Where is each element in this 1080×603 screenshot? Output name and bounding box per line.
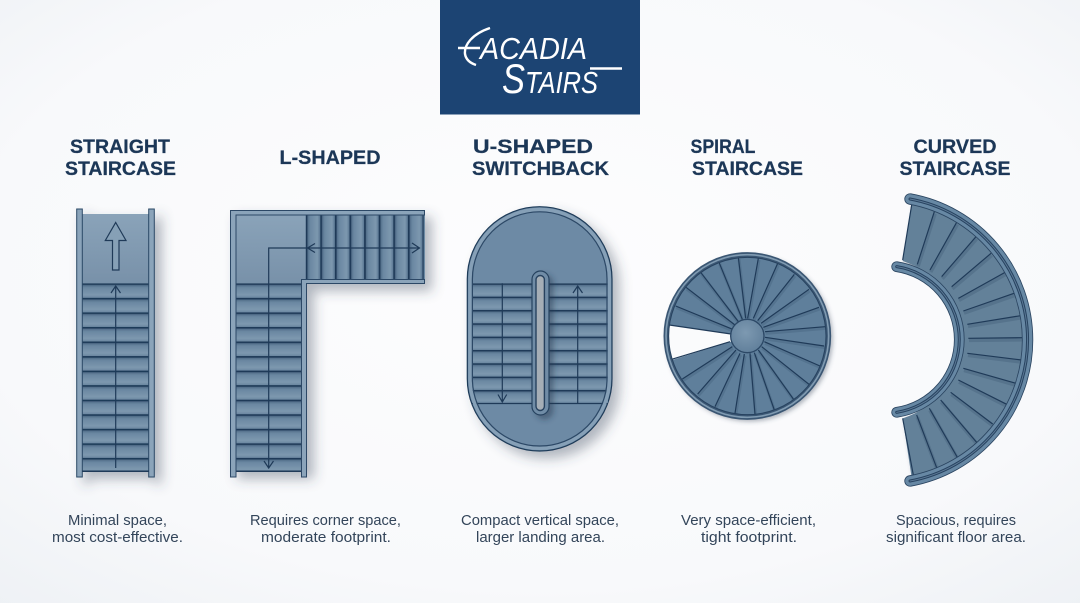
heading: spiral staircase — [690, 136, 803, 180]
diagram: L-shaped staircase — [230, 210, 425, 477]
description: straight: most cost-effective. — [52, 530, 183, 546]
heading: curved staircase: CURVED — [914, 136, 996, 158]
heading: straight staircase — [65, 136, 176, 180]
heading: curved staircase: STAIRCASE — [900, 158, 1010, 180]
description: straight: Minimal space, — [68, 513, 167, 529]
logo: Acadia Stairs — [440, 0, 640, 114]
heading: straight staircase: STAIRCASE — [65, 158, 176, 180]
heading: spiral staircase: SPIRAL — [690, 136, 756, 158]
diagram: curved staircase — [897, 199, 1028, 481]
description: curved — [886, 513, 1026, 546]
description: curved: Spacious, requires — [896, 513, 1016, 529]
description: U-shaped: larger landing area. — [476, 530, 605, 546]
heading: U-shaped switchback — [472, 136, 609, 180]
central hub — [731, 319, 764, 353]
description: L-shaped — [250, 513, 401, 546]
inner handrail — [897, 267, 959, 412]
diagram: spiral staircase — [664, 253, 831, 419]
heading: curved staircase — [900, 136, 1010, 180]
heading: U-shaped switchback: U-SHAPED — [473, 136, 593, 158]
description: spiral: tight footprint. — [701, 530, 797, 546]
description: U-shaped: Compact vertical space, — [461, 513, 619, 529]
central post — [532, 271, 549, 415]
heading: U-shaped switchback: SWITCHBACK — [472, 158, 609, 180]
description: spiral: Very space-efficient, — [681, 513, 816, 529]
description: spiral — [681, 513, 816, 546]
arrows: up and down walk lines — [498, 283, 582, 403]
description: L-shaped: Requires corner space, — [250, 513, 401, 529]
description: U-shaped — [461, 513, 619, 546]
outer handrail — [910, 199, 1028, 481]
heading: L-shaped: L-SHAPED — [280, 147, 380, 169]
logo: Acadia Stairs: STAIRS — [502, 55, 598, 102]
arrow: straight walk line — [111, 286, 120, 468]
arrow: L walk line — [264, 243, 420, 468]
description: straight — [52, 513, 183, 546]
logo: Acadia Stairs: ACADIA — [478, 31, 587, 66]
heading: straight staircase: STRAIGHT — [70, 136, 170, 158]
heading: spiral staircase: STAIRCASE — [692, 158, 803, 180]
description: curved: significant floor area. — [886, 530, 1026, 546]
description: L-shaped: moderate footprint. — [261, 530, 391, 546]
diagram: U-shaped switchback — [467, 207, 612, 451]
diagram: straight staircase — [77, 209, 154, 477]
icon: large up arrow — [105, 222, 126, 270]
